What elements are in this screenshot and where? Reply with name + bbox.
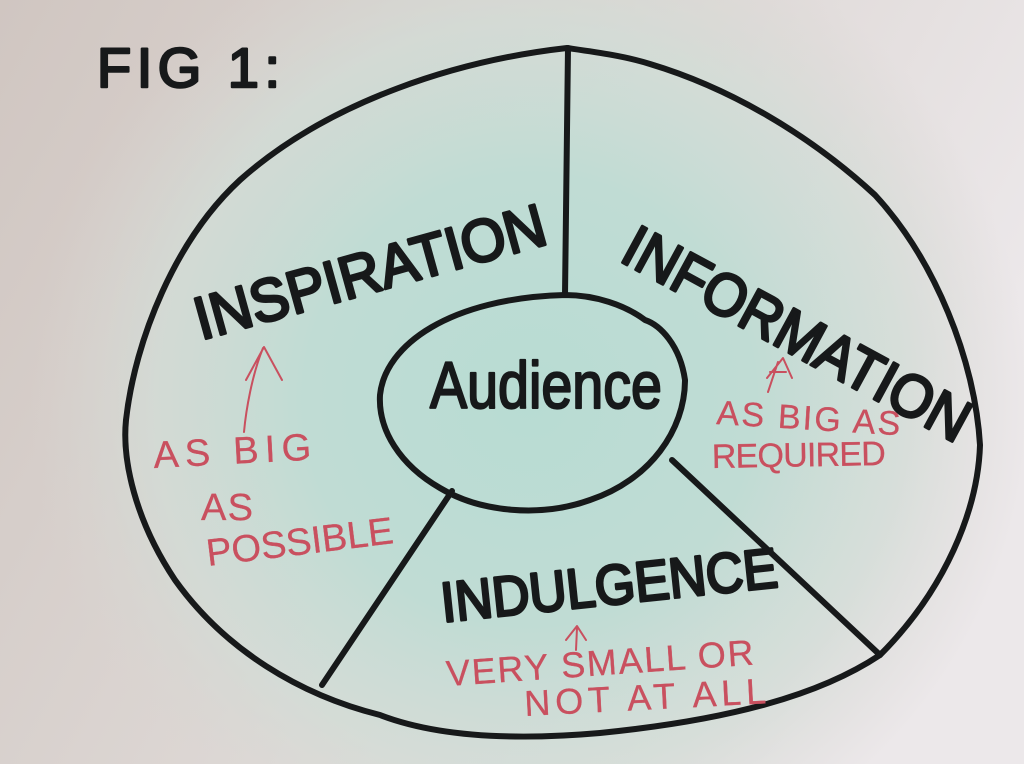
arrow: inspiration note — [244, 347, 282, 432]
note: very small or not at all: VERY SMALL OR — [445, 632, 755, 694]
audience circle — [380, 295, 685, 510]
label: inspiration: INSPIRATION — [187, 191, 553, 353]
note: very small or not at all: NOT AT ALL — [523, 670, 767, 724]
note: very small or not at all — [445, 632, 767, 724]
note: as big as possible: AS — [201, 487, 253, 529]
figure heading: FIG 1: — [97, 36, 280, 99]
label: information: INFORMATION — [612, 213, 982, 455]
note: as big as required: AS BIG AS — [716, 394, 901, 443]
note: as big as possible: AS BIG — [152, 427, 312, 477]
divider: inspiration and indulgence — [322, 491, 452, 685]
label: indulgence: INDULGENCE — [438, 536, 780, 634]
note: as big as possible: POSSIBLE — [204, 510, 396, 575]
diagram outer circle — [125, 48, 980, 737]
note: as big as required: REQUIRED — [711, 435, 886, 476]
arrow: indulgence note — [566, 626, 586, 650]
divider: information and indulgence — [672, 460, 880, 655]
note: as big as possible — [152, 427, 396, 575]
arrow: information note — [767, 358, 792, 392]
divider: inspiration and information — [565, 48, 568, 295]
note: as big as required — [711, 394, 901, 476]
label: audience: Audience — [430, 348, 662, 422]
